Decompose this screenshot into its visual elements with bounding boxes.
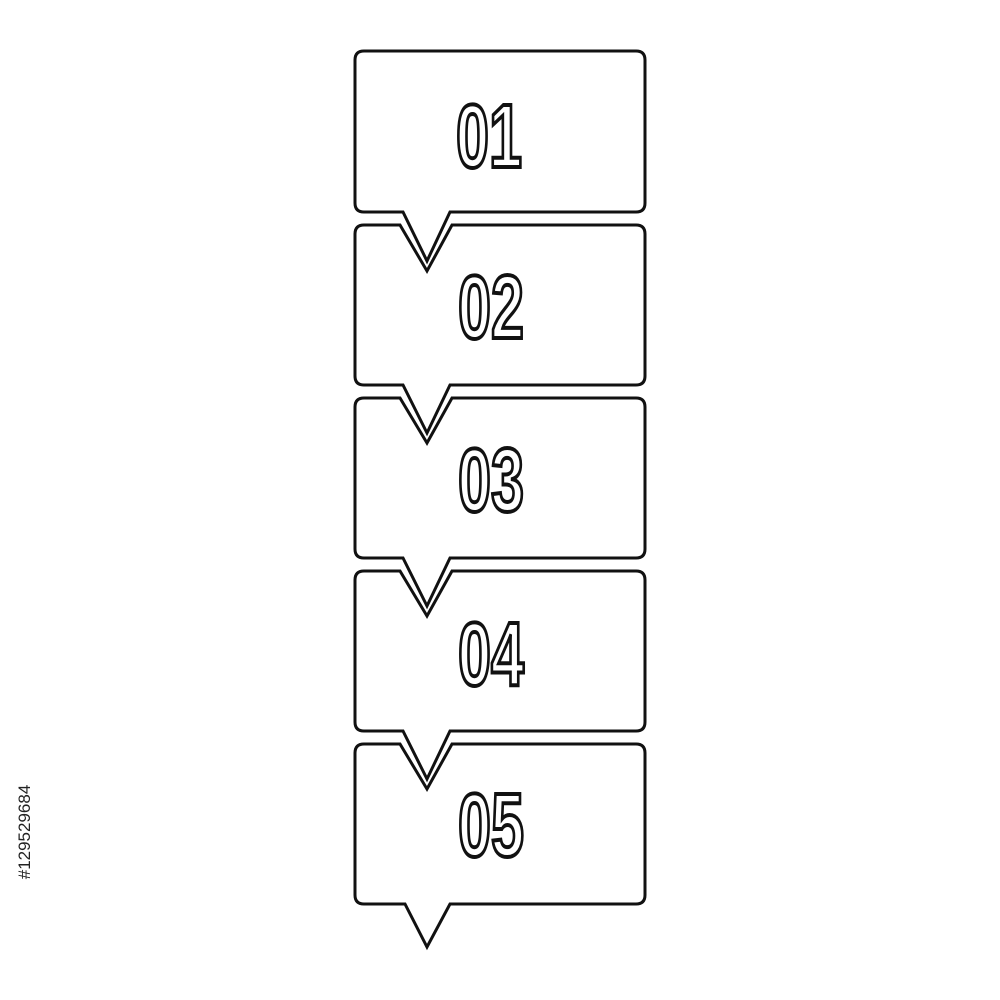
box 01: [355, 51, 645, 261]
box 02: [355, 225, 645, 433]
box 04: 04: [458, 605, 524, 705]
box 02: 02: [458, 258, 524, 358]
watermark id text: #129529684: [15, 785, 34, 879]
box 04: [355, 571, 645, 779]
box 05: 05: [458, 776, 524, 876]
box 01: 01: [456, 87, 522, 187]
box 05: [355, 744, 645, 947]
box 03: 03: [458, 431, 524, 531]
box 03: [355, 398, 645, 606]
